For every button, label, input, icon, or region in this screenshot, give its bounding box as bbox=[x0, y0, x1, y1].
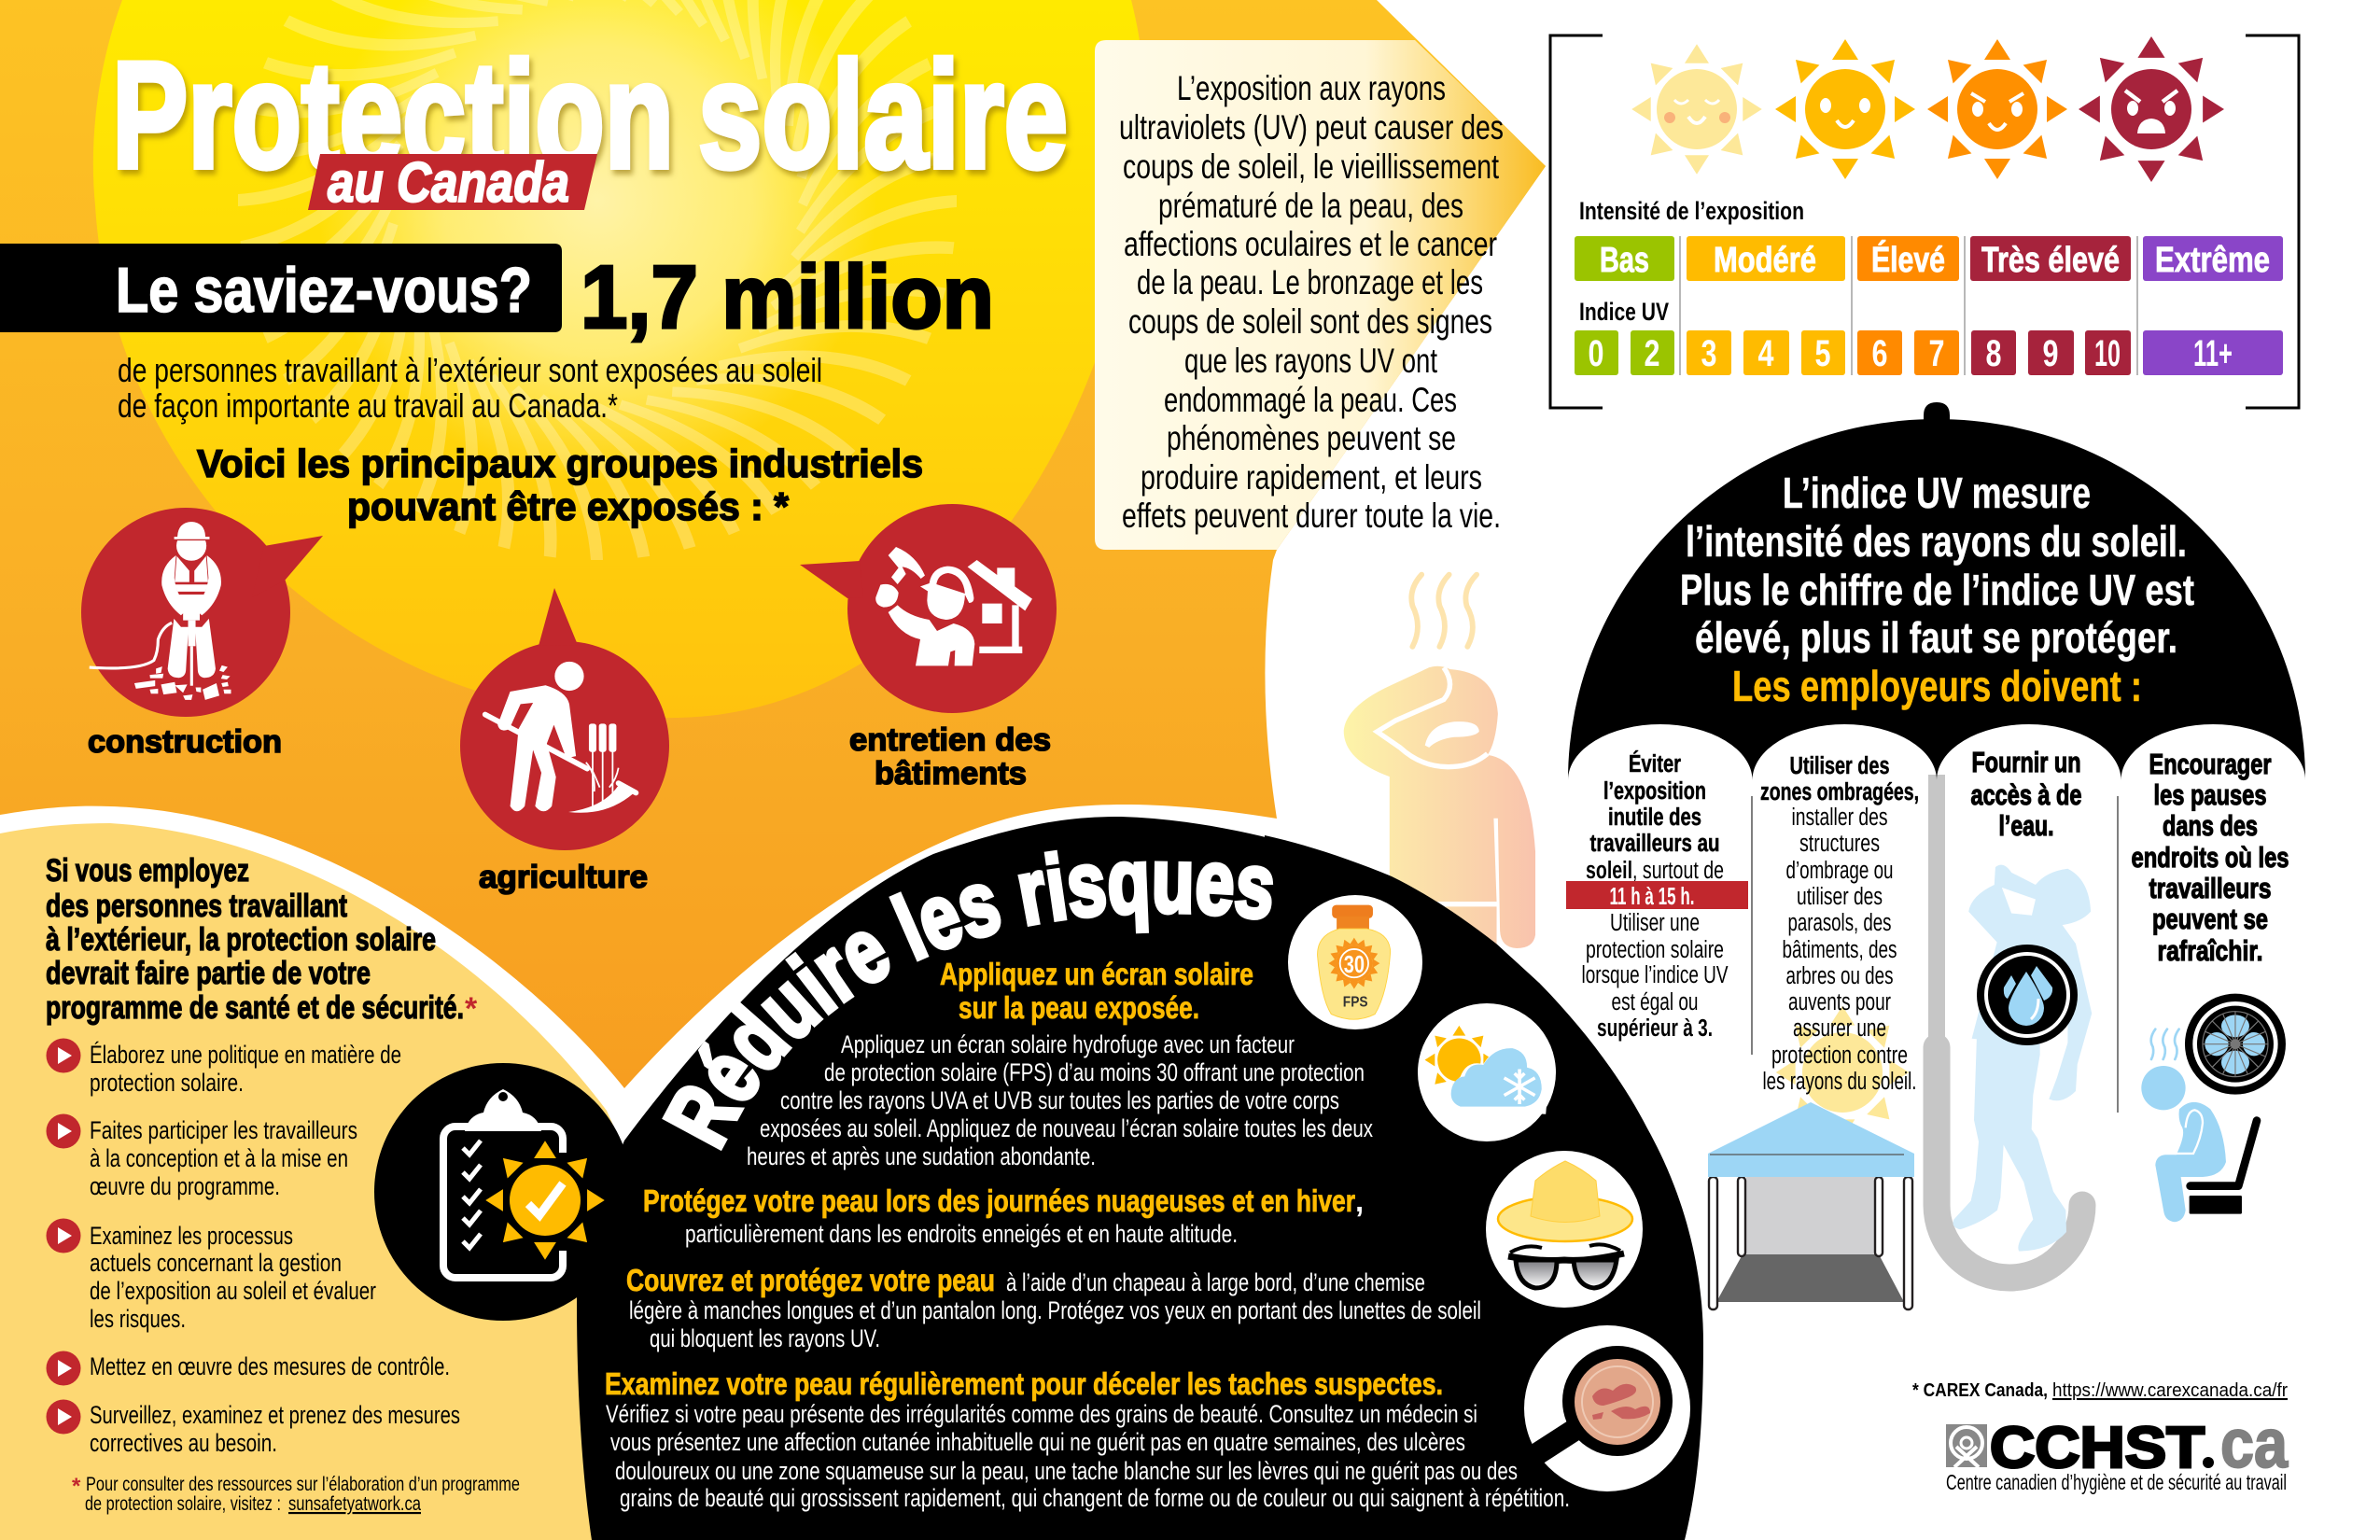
column: shaded areas: Utiliser des bbox=[1790, 753, 1889, 779]
label: intensity: Intensité de l’exposition bbox=[1579, 197, 1804, 225]
bullet list: à la conception et à la mise en bbox=[90, 1144, 348, 1172]
heading: program: devrait faire partie de votre bbox=[46, 956, 371, 991]
statistic: 1,7 million: 1,7 million bbox=[581, 247, 994, 347]
text: UV index explanation: Plus le chiffre de l’indice UV est bbox=[1680, 566, 2194, 614]
footnote: resources: sunsafetyatwork.ca bbox=[288, 1492, 421, 1515]
column: avoid exposure: supérieur à 3. bbox=[1597, 1015, 1713, 1042]
icon: sunscreen bottle bbox=[1288, 895, 1422, 1029]
advice: cover skin: Couvrez et protégez votre peau bbox=[626, 1263, 995, 1297]
bullet list: de l’exposition au soleil et évaluer bbox=[90, 1277, 376, 1305]
scale: UV index numbers: 3 bbox=[1701, 333, 1717, 374]
text: statistic description bbox=[118, 351, 822, 425]
column: shaded areas: protection contre bbox=[1771, 1043, 1908, 1069]
label: entretien des bâtiments: entretien des bbox=[849, 722, 1051, 758]
scale: intensity categories bbox=[1575, 236, 2283, 281]
label: entretien des bâtiments: bâtiments bbox=[875, 756, 1027, 791]
column: avoid exposure: l’exposition bbox=[1603, 778, 1706, 805]
advice: cloudy and winter bbox=[643, 1183, 1364, 1248]
advice: sunscreen bbox=[747, 957, 1373, 1170]
text: UV exposure effects: produire rapidement, et leurs bbox=[1141, 458, 1482, 497]
background: sun disc with rays bbox=[93, 0, 1144, 718]
icon: sun low bbox=[1631, 44, 1762, 175]
bullet list: correctives au besoin. bbox=[90, 1429, 277, 1457]
scale: UV index numbers: 11+ bbox=[2193, 333, 2233, 374]
scale: UV index numbers: 5 bbox=[1814, 333, 1831, 374]
umbrella dome bbox=[1568, 402, 2305, 780]
advice: cloudy and winter: particulièrement dans les endroits enneigés et en haute altitude. bbox=[685, 1220, 1238, 1248]
title: Protection bbox=[112, 31, 674, 200]
bullet list: protection solaire. bbox=[90, 1069, 244, 1097]
icon: sun high bbox=[1927, 39, 2067, 179]
icon: sun, cloud and snowflake bbox=[1418, 1003, 1556, 1141]
advice: examine skin: Examinez votre peau régulièrement pour déceler les taches suspectes. bbox=[605, 1366, 1443, 1401]
scale: UV index numbers: 6 bbox=[1872, 333, 1887, 374]
column: shaded areas: utiliser des bbox=[1797, 884, 1883, 910]
icon: magnifier on skin bbox=[1517, 1325, 1690, 1491]
scale: intensity categories: Très élevé bbox=[1981, 241, 2120, 280]
column: shaded areas: d’ombrage ou bbox=[1786, 858, 1893, 884]
column: shaded areas: assurer une bbox=[1793, 1015, 1886, 1042]
scale: UV index numbers: 2 bbox=[1645, 333, 1659, 374]
column: avoid exposure: soleil, surtout de bbox=[1586, 858, 1724, 884]
icon: sun extreme bbox=[2079, 36, 2224, 182]
red asterisk: * bbox=[465, 991, 478, 1027]
source: CAREX: * CAREX Canada, bbox=[1912, 1379, 2048, 1401]
advice: cover skin: légère à manches longues et d’un pantalon long. Protégez vos yeux en portant des lunettes de soleil bbox=[629, 1296, 1481, 1324]
icon: gazebo with sun bbox=[1708, 1006, 1914, 1309]
bullet list: Mettez en œuvre des mesures de contrôle. bbox=[90, 1352, 450, 1380]
column: encourage breaks bbox=[2132, 748, 2289, 967]
bracket: UV index scale bbox=[1550, 35, 2299, 408]
scale: UV index numbers: 10 bbox=[2094, 333, 2121, 374]
column: avoid exposure: Éviter bbox=[1629, 750, 1681, 777]
column: encourage breaks: peuvent se bbox=[2152, 903, 2268, 935]
panel: employers program bbox=[0, 823, 653, 1540]
callout: Le saviez-vous: Le saviez-vous? bbox=[116, 255, 532, 326]
column: shaded areas: les rayons du soleil. bbox=[1762, 1069, 1917, 1095]
umbrella handle bbox=[1937, 775, 2082, 1278]
icon: hat and sunglasses bbox=[1486, 1151, 1643, 1308]
advice: cloudy and winter: , bbox=[1355, 1183, 1364, 1218]
column: water access: accès à de bbox=[1971, 778, 2081, 811]
bullet list bbox=[47, 1038, 460, 1457]
advice: examine skin: grains de beauté qui grossissent rapidement, qui changent de forme ou de couleur ou qui saignent à répétition. bbox=[620, 1484, 1570, 1512]
text: UV exposure effects: coups de soleil, le vieillissement bbox=[1123, 147, 1500, 186]
column: shaded areas: structures bbox=[1799, 831, 1880, 857]
logo: CCHST: ca bbox=[2220, 1405, 2289, 1482]
advice: sunscreen: de protection solaire (FPS) d’au moins 30 offrant une protection bbox=[824, 1058, 1365, 1086]
column: water access: Fournir un bbox=[1971, 746, 2081, 778]
column: avoid exposure: 11 h à 15 h. bbox=[1609, 884, 1695, 910]
circle: clipboard with sun bbox=[374, 1063, 632, 1321]
logo: CCHST: CCHST bbox=[1990, 1416, 2205, 1480]
text: UV exposure effects: coups de soleil sont des signes bbox=[1128, 302, 1492, 341]
heading: Réduire les risques: Réduire les risques bbox=[662, 849, 1273, 1152]
text: UV exposure effects: endommagé la peau. Ces bbox=[1164, 381, 1457, 419]
column: shaded areas: parasols, des bbox=[1788, 910, 1891, 936]
source: CAREX bbox=[1912, 1379, 2288, 1401]
label: construction: construction bbox=[88, 724, 282, 760]
text: UV index explanation bbox=[1680, 469, 2194, 710]
column: encourage breaks: rafraîchir. bbox=[2158, 934, 2262, 967]
icon: water drops bbox=[1977, 945, 2078, 1045]
column: shaded areas: auvents pour bbox=[1788, 989, 1891, 1015]
advice: cover skin: qui bloquent les rayons UV. bbox=[650, 1324, 880, 1352]
panel: reduce risks black dome bbox=[577, 817, 1703, 1540]
dividers bbox=[1752, 796, 2118, 1113]
column: encourage breaks: dans des bbox=[2163, 809, 2258, 842]
scale: intensity categories: Modéré bbox=[1714, 241, 1816, 280]
text: statistic description: de personnes travaillant à l’extérieur sont exposées au soleil bbox=[118, 351, 822, 389]
text: UV index explanation: L’indice UV mesure bbox=[1783, 469, 2091, 517]
scale: UV index numbers: 4 bbox=[1758, 333, 1774, 374]
heading: program bbox=[46, 853, 464, 1026]
scale: UV index numbers: 8 bbox=[1986, 333, 2001, 374]
column: encourage breaks: endroits où les bbox=[2132, 841, 2289, 874]
heading: main industry groups: pouvant être exposés : * bbox=[347, 484, 790, 528]
column: avoid exposure bbox=[1566, 750, 1748, 1042]
redraw black over the figure bbox=[1265, 835, 1540, 984]
scale: intensity categories: Élevé bbox=[1871, 239, 1945, 280]
column: avoid exposure: inutile des bbox=[1608, 805, 1701, 831]
column: encourage breaks: les pauses bbox=[2154, 778, 2266, 811]
text: UV exposure effects: ultraviolets (UV) peut causer des bbox=[1119, 108, 1504, 147]
column: avoid exposure: lorsque l’indice UV bbox=[1581, 962, 1729, 988]
column: shaded areas: zones ombragées, bbox=[1760, 779, 1919, 805]
heading: main industry groups bbox=[197, 441, 923, 528]
icon: overheated person bbox=[1344, 575, 1535, 976]
label: indice UV: Indice UV bbox=[1579, 298, 1669, 326]
column: shaded areas: arbres ou des bbox=[1786, 963, 1893, 989]
text: statistic description: de façon importante au travail au Canada.* bbox=[118, 386, 618, 425]
advice: sunscreen: heures et après une sudation abondante. bbox=[747, 1142, 1096, 1170]
icon: sunscreen bottle: 30 bbox=[1344, 952, 1365, 978]
advice: cover skin bbox=[626, 1263, 1481, 1352]
footnote: resources: Pour consulter des ressources sur l’élaboration d’un programme bbox=[86, 1473, 520, 1495]
advice: sunscreen: exposées au soleil. Appliquez de nouveau l’écran solaire toutes les deux bbox=[760, 1114, 1373, 1142]
bullet list: Surveillez, examinez et prenez des mesures bbox=[90, 1401, 460, 1429]
text: UV exposure effects: que les rayons UV ont bbox=[1184, 342, 1438, 380]
heading: program: programme de santé et de sécurité. bbox=[46, 990, 464, 1026]
icon: building maintenance bubble bbox=[800, 504, 1057, 713]
column: encourage breaks: travailleurs bbox=[2149, 872, 2272, 904]
column: avoid exposure: Utiliser une bbox=[1610, 910, 1700, 936]
column: avoid exposure: est égal ou bbox=[1611, 989, 1699, 1015]
bullet list: les risques. bbox=[90, 1305, 186, 1333]
bullet list: Examinez les processus bbox=[90, 1222, 293, 1250]
text: employers must: Les employeurs doivent : bbox=[1732, 662, 2142, 710]
heading: program: Si vous employez bbox=[46, 853, 249, 889]
panel: exposure text arrow bbox=[1095, 40, 1546, 550]
heading: program: à l’extérieur, la protection solaire bbox=[46, 922, 436, 958]
icon: sunscreen bottle: FPS bbox=[1343, 994, 1368, 1011]
text: UV exposure effects: phénomènes peuvent se bbox=[1167, 419, 1456, 457]
advice: cloudy and winter: Protégez votre peau lors des journées nuageuses et en hiver bbox=[643, 1183, 1355, 1218]
scale: UV index numbers: 0 bbox=[1589, 333, 1603, 374]
callout: Le saviez-vous bbox=[0, 244, 562, 332]
source: CAREX: https://www.carexcanada.ca/fr bbox=[2052, 1379, 2288, 1401]
advice: examine skin: douloureux ou une zone squameuse sur la peau, une tache blanche sur les lèvres qui ne guérit pas ou des bbox=[615, 1457, 1518, 1485]
advice: cover skin: à l’aide d’un chapeau à large bord, d’une chemise bbox=[1006, 1268, 1425, 1296]
icon: sun moderate bbox=[1775, 39, 1915, 179]
bullet list: Faites participer les travailleurs bbox=[90, 1116, 357, 1144]
advice: sunscreen: Appliquez un écran solaire hydrofuge avec un facteur bbox=[841, 1030, 1295, 1058]
icon: agriculture worker bubble bbox=[460, 588, 669, 850]
advice: sunscreen: Appliquez un écran solaire bbox=[940, 957, 1253, 991]
column: shaded areas: bâtiments, des bbox=[1783, 937, 1897, 963]
text: UV exposure effects: prématuré de la peau, des bbox=[1158, 187, 1463, 225]
column: encourage breaks: Encourager bbox=[2149, 748, 2272, 780]
scale: UV index numbers bbox=[1575, 330, 2283, 375]
text: UV exposure effects: effets peuvent durer toute la vie. bbox=[1122, 497, 1501, 535]
icon: construction worker bubble bbox=[81, 508, 323, 717]
subtitle: au Canada: au Canada bbox=[328, 151, 569, 214]
footnote: resources: * bbox=[72, 1474, 81, 1499]
label: entretien des bâtiments bbox=[849, 722, 1051, 791]
text: UV exposure effects: affections oculaires et le cancer bbox=[1124, 225, 1497, 263]
footnote: resources: de protection solaire, visitez : bbox=[85, 1492, 281, 1515]
heading: program: des personnes travaillant bbox=[46, 889, 347, 924]
icon: person cooling by fan bbox=[2141, 994, 2286, 1222]
column: avoid exposure: travailleurs au bbox=[1590, 831, 1719, 857]
bullet list: Élaborez une politique en matière de bbox=[90, 1041, 401, 1069]
scale: intensity categories: Bas bbox=[1600, 241, 1649, 280]
footnote: resources bbox=[72, 1473, 520, 1515]
scale: UV index numbers: 7 bbox=[1928, 333, 1945, 374]
advice: examine skin bbox=[605, 1366, 1570, 1512]
column: water access bbox=[1971, 746, 2081, 842]
scale: intensity categories: Extrême bbox=[2155, 241, 2270, 280]
column: avoid exposure: protection solaire bbox=[1586, 937, 1724, 963]
heading: main industry groups: Voici les principaux groupes industriels bbox=[197, 441, 923, 485]
title: solaire bbox=[698, 31, 1068, 200]
column: shaded areas bbox=[1760, 753, 1919, 1095]
text: UV index explanation: élevé, plus il faut se protéger. bbox=[1695, 613, 2177, 662]
advice: sunscreen: contre les rayons UVA et UVB sur toutes les parties de votre corps bbox=[780, 1086, 1339, 1114]
label: agriculture: agriculture bbox=[479, 860, 648, 895]
advice: examine skin: vous présentez une affection cutanée inhabituelle qui ne guérit pas en quatre semaines, des ulcères bbox=[610, 1428, 1465, 1456]
text: reduce risks advice bbox=[605, 957, 1570, 1512]
scale: UV index numbers: 9 bbox=[2042, 333, 2059, 374]
text: UV exposure effects: L’exposition aux rayons bbox=[1177, 69, 1446, 107]
text: UV exposure effects: de la peau. Le bronzage et les bbox=[1137, 263, 1483, 301]
text: UV index explanation: l’intensité des rayons du soleil. bbox=[1686, 517, 2187, 566]
column: water access: l’eau. bbox=[1999, 809, 2053, 842]
advice: sunscreen: sur la peau exposée. bbox=[959, 990, 1199, 1025]
advice: examine skin: Vérifiez si votre peau présente des irrégularités comme des grains de beauté. Consultez un médecin si bbox=[606, 1400, 1477, 1428]
column: shaded areas: installer des bbox=[1792, 805, 1887, 831]
bullet list: œuvre du programme. bbox=[90, 1172, 280, 1200]
logo: CCHST bbox=[1946, 1405, 2289, 1494]
icon: man drinking water bbox=[1953, 865, 2092, 1252]
background: orange field bbox=[0, 0, 1546, 1088]
bullet list: actuels concernant la gestion bbox=[90, 1249, 342, 1277]
text: UV exposure effects bbox=[1119, 69, 1504, 535]
